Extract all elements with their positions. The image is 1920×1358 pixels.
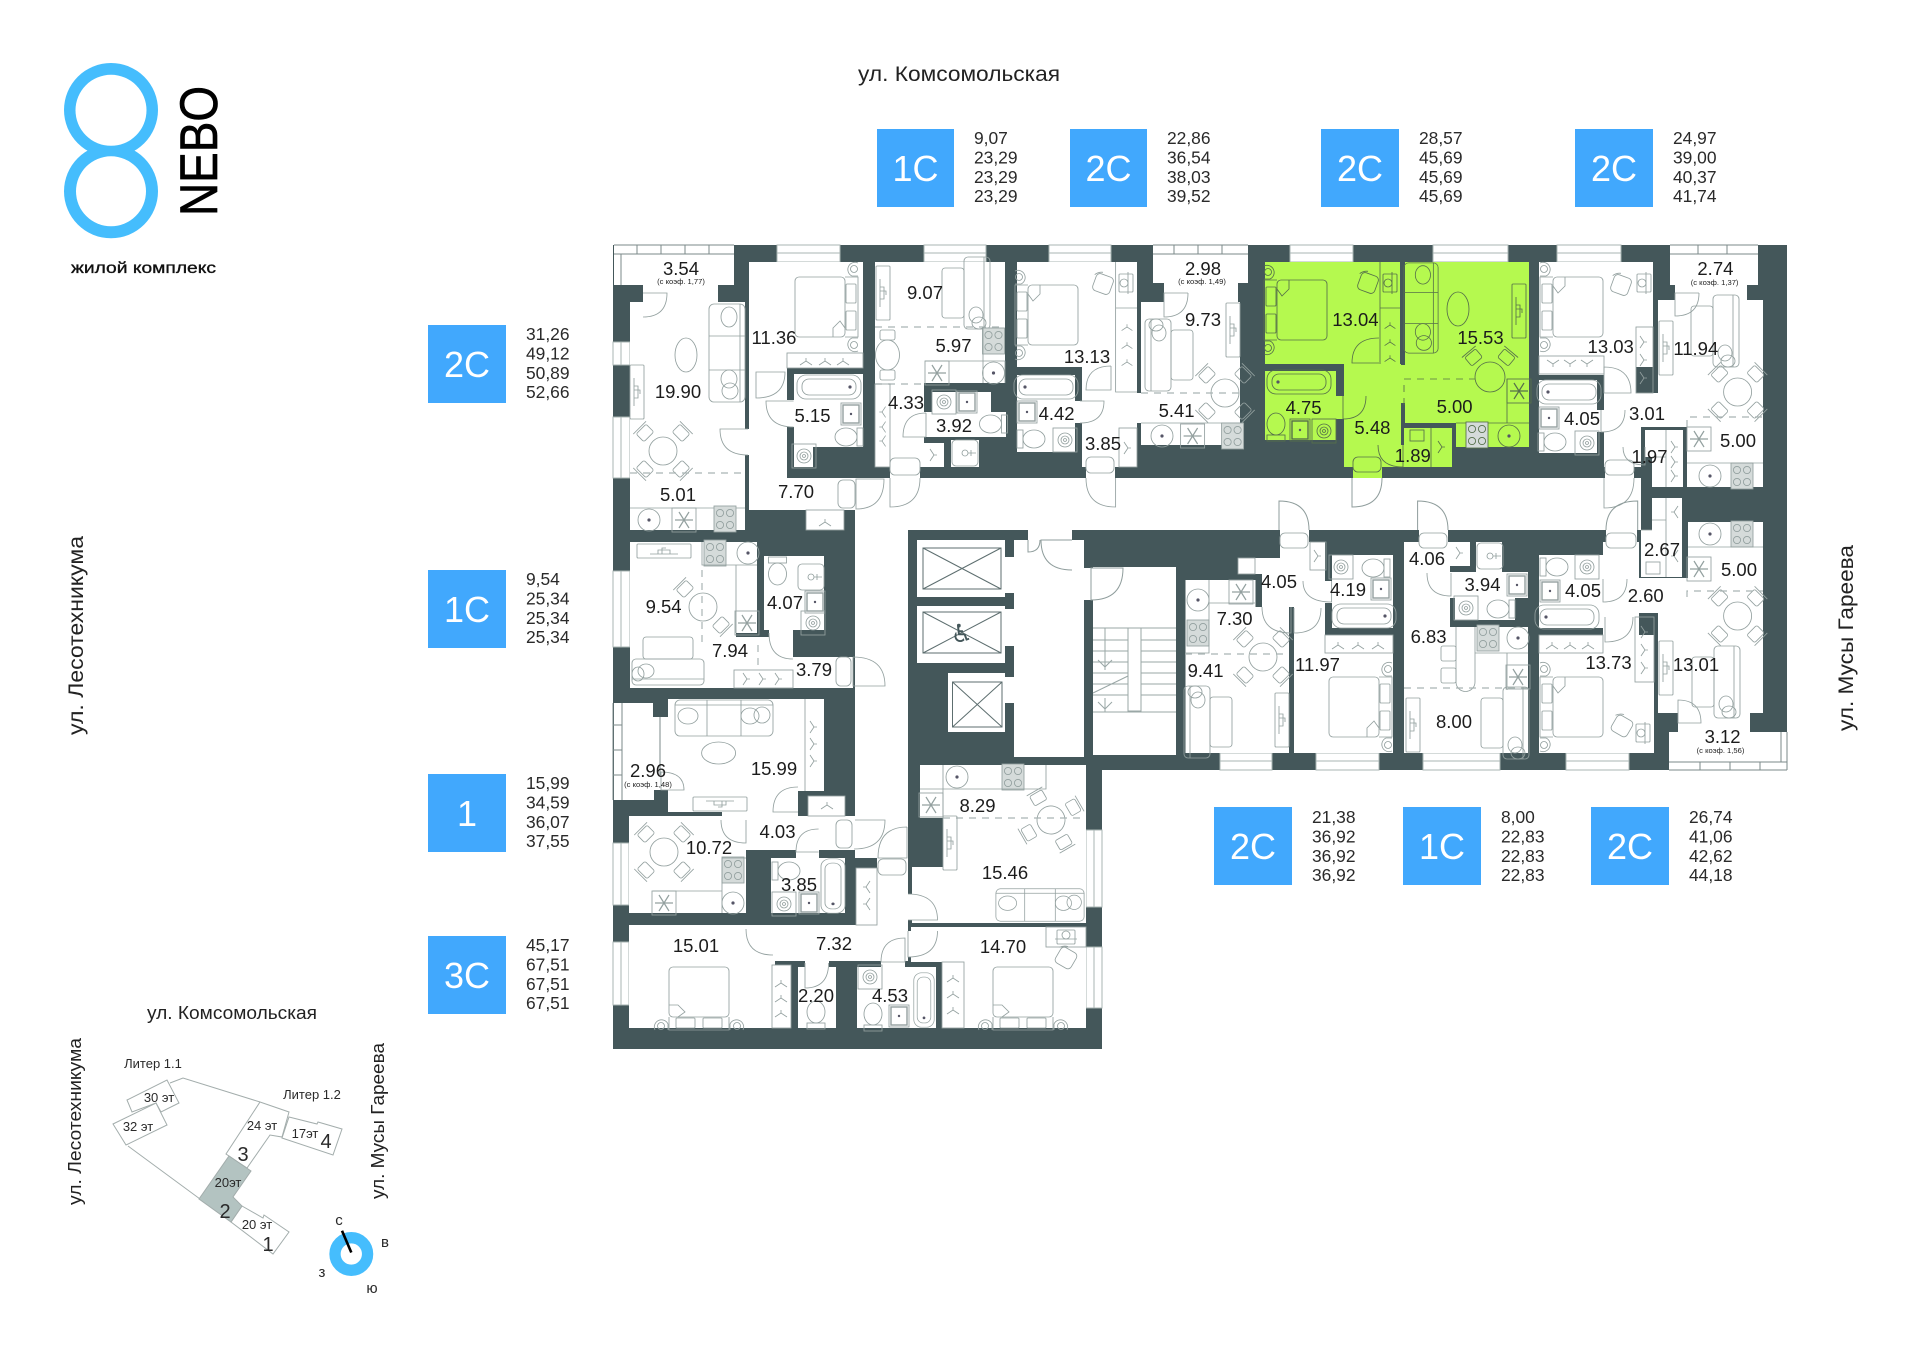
area labels: 1.97 — [1631, 446, 1668, 467]
entrance door — [1418, 501, 1448, 530]
badge 3С 45,17: 67,51 — [526, 954, 570, 974]
area labels: 2.60 — [1628, 585, 1664, 606]
badge 2С 28,57: 45,69 — [1419, 167, 1463, 187]
lobby doors — [1028, 540, 1123, 600]
badge 2С 31,26: 52,66 — [526, 382, 570, 402]
badge 1С 8,00: 8,00 — [1501, 807, 1535, 827]
area labels: 13.13 — [1064, 346, 1110, 367]
area labels — [1564, 258, 1756, 467]
area labels: 5.00 — [1720, 430, 1756, 451]
badge 2С 24,97 — [1575, 128, 1717, 207]
area labels: 4.33 — [888, 392, 924, 413]
area labels: 2.20 — [798, 985, 834, 1006]
badge 2С 31,26: 2С — [444, 344, 490, 385]
balcony rail — [1669, 732, 1787, 770]
badge 3С 45,17: 67,51 — [526, 974, 570, 994]
apartment 1 15,99 — [613, 699, 885, 916]
area labels: 3.92 — [936, 415, 972, 436]
lifts — [917, 540, 1014, 732]
area labels: 7.30 — [1217, 608, 1253, 629]
logo wordmark: NEBO — [170, 86, 229, 216]
badge 2С 28,57: 45,69 — [1419, 186, 1463, 206]
badge 2С 24,97: 2С — [1591, 148, 1637, 189]
badge 2С 24,97: 39,00 — [1673, 148, 1717, 168]
badge 1С 8,00: 22,83 — [1501, 826, 1545, 846]
street label: left: ул. Лесотехникума — [65, 536, 88, 735]
area labels: 13.73 — [1585, 652, 1632, 673]
key plan labels: Литер 1.2 — [283, 1087, 341, 1102]
rooms — [1265, 262, 1529, 478]
badge 2С 22,86: 2С — [1085, 148, 1132, 189]
furniture — [1404, 533, 1530, 759]
entrance door — [1279, 501, 1309, 530]
badge 1 15,99 — [428, 773, 570, 852]
area labels: 3.85 — [1085, 433, 1121, 454]
street label: right: ул. Мусы Гареева — [1835, 545, 1858, 731]
area labels: 5.41 — [1159, 400, 1195, 421]
area labels: (с коэф. 1,49) — [1178, 277, 1226, 286]
area labels: 15.01 — [673, 935, 719, 956]
badge 1С 9,54: 25,34 — [526, 627, 570, 647]
furniture — [1184, 533, 1396, 758]
key plan labels: 24 эт — [247, 1118, 277, 1133]
apartment 1С 9,07 — [875, 257, 1008, 507]
badge 1С 9,07 — [877, 128, 1018, 207]
apartment 2С 24,97 — [1537, 245, 1767, 508]
area labels: 5.97 — [935, 335, 972, 356]
rooms — [630, 542, 853, 688]
rooms — [1186, 530, 1393, 753]
area labels: 3.94 — [1464, 574, 1501, 595]
area labels — [1188, 571, 1366, 681]
key plan labels: 1 — [262, 1234, 274, 1256]
furniture — [1264, 262, 1531, 472]
badge 2С 21,38: 21,38 — [1312, 807, 1356, 827]
badge 2С 26,74 — [1591, 807, 1733, 885]
badge 1С 9,54: 25,34 — [526, 588, 570, 608]
badge 1С 8,00: 1С — [1419, 826, 1465, 867]
badge 2С 26,74: 44,18 — [1689, 865, 1733, 885]
lobby hall — [1014, 530, 1093, 757]
area labels: 4.06 — [1409, 548, 1445, 569]
area labels: (с коэф. 1,48) — [624, 780, 672, 789]
key plan labels: 3 — [237, 1144, 249, 1166]
area labels: 5.00 — [1437, 396, 1473, 417]
key plan street right: ул. Мусы Гареева — [368, 1042, 388, 1199]
area labels — [1409, 548, 1501, 732]
badge 3С 45,17 — [428, 935, 570, 1014]
compass — [319, 1212, 389, 1297]
area labels: 3.85 — [781, 874, 817, 895]
badge 1 15,99: 15,99 — [526, 773, 570, 793]
area labels: (с коэф. 1,37) — [1691, 278, 1739, 287]
apartment 1С 9,54 — [630, 540, 885, 688]
area labels: 7.70 — [778, 481, 814, 502]
icon: wheelchair: ♿ — [951, 619, 973, 648]
area labels: 11.36 — [752, 327, 796, 348]
area labels: 11.94 — [1673, 338, 1718, 359]
badge 2С 24,97: 40,37 — [1673, 167, 1717, 187]
badge 2С 31,26 — [428, 324, 570, 403]
key plan street left: ул. Лесотехникума — [65, 1037, 85, 1205]
corridor — [855, 478, 1641, 858]
area labels: 2.67 — [1644, 539, 1680, 560]
badge 2С 31,26: 49,12 — [526, 344, 570, 364]
badge 2С 22,86: 39,52 — [1167, 186, 1211, 206]
area labels: 6.83 — [1411, 626, 1447, 647]
balcony rail — [1153, 245, 1248, 254]
area labels: 4.05 — [1565, 580, 1601, 601]
badge 1С 8,00: 22,83 — [1501, 846, 1545, 866]
badge 1С 9,07: 9,07 — [974, 128, 1008, 148]
badge 2С 26,74: 42,62 — [1689, 846, 1733, 866]
badge 1С 9,07: 23,29 — [974, 186, 1018, 206]
area labels: 13.01 — [1673, 654, 1719, 675]
key plan labels: 4 — [320, 1131, 332, 1153]
badge 2С 26,74: 26,74 — [1689, 807, 1733, 827]
rooms — [614, 699, 855, 913]
key plan labels: Литер 1.1 — [124, 1056, 182, 1071]
area labels: 11.97 — [1295, 654, 1340, 675]
furniture — [634, 699, 885, 916]
apartment 2С 22,86 — [1014, 245, 1255, 507]
area labels — [646, 592, 832, 680]
area labels: (с коэф. 1,77) — [657, 277, 705, 286]
area labels — [624, 758, 817, 895]
window mullions — [621, 253, 1629, 1008]
logo figure eight — [64, 63, 158, 238]
area labels: 9.54 — [646, 596, 682, 617]
furniture — [1014, 262, 1255, 507]
area labels: 15.99 — [751, 758, 797, 779]
area labels: 10.72 — [686, 837, 732, 858]
rooms — [875, 262, 1006, 478]
badge 2С 21,38: 2С — [1230, 826, 1276, 867]
rooms — [1017, 245, 1248, 478]
rooms — [1539, 245, 1763, 487]
badge 2С 24,97: 24,97 — [1673, 128, 1717, 148]
area labels: 13.03 — [1588, 336, 1634, 357]
badge 2С 31,26: 31,26 — [526, 324, 570, 344]
balcony rail — [614, 245, 734, 285]
area labels: 4.05 — [1564, 408, 1600, 429]
badge 2С 21,38: 36,92 — [1312, 826, 1356, 846]
area labels — [673, 795, 1028, 1006]
rooms — [1404, 530, 1528, 753]
badge 2С 21,38 — [1214, 807, 1356, 885]
apartment 1С 8,00 — [1404, 501, 1530, 759]
badge 2С 28,57: 28,57 — [1419, 128, 1463, 148]
area labels: 3.01 — [1629, 403, 1665, 424]
building walls — [613, 245, 1787, 1049]
site key plan — [65, 1003, 389, 1297]
staircase — [1093, 567, 1176, 755]
area labels: 3.79 — [796, 659, 832, 680]
badge 1С 9,54: 9,54 — [526, 569, 560, 589]
badge 1С 9,54 — [428, 569, 570, 648]
compass: ю — [366, 1280, 378, 1297]
logo tagline: жилой комплекс — [71, 260, 216, 277]
area labels: 3.54 — [663, 258, 699, 279]
corridor and lobby — [855, 478, 1641, 858]
key plan street top: ул. Комсомольская — [147, 1003, 317, 1023]
entrance door — [1352, 478, 1382, 507]
area labels: 9.41 — [1188, 660, 1224, 681]
area labels — [888, 282, 972, 436]
badge 1 15,99: 36,07 — [526, 812, 570, 832]
area labels: 8.00 — [1436, 711, 1472, 732]
area labels: 4.03 — [759, 821, 796, 842]
area labels: 19.90 — [655, 381, 701, 402]
badge 2С 26,74: 2С — [1607, 826, 1653, 867]
badge 1 15,99: 37,55 — [526, 831, 570, 851]
apartment 2С 31,26 — [614, 245, 884, 532]
entrance door — [1606, 501, 1638, 530]
logo: 8 NEBO — [64, 63, 229, 277]
compass: з — [319, 1264, 326, 1281]
key plan current section — [199, 1156, 251, 1222]
area labels: (с коэф. 1,56) — [1697, 746, 1745, 755]
windows — [613, 245, 1629, 1008]
area labels: 5.15 — [794, 405, 831, 426]
area labels: 9.73 — [1185, 309, 1221, 330]
area labels: 15.53 — [1457, 327, 1504, 348]
apartment 2С 26,74 — [1535, 498, 1787, 770]
badge 2С 28,57 — [1321, 128, 1463, 207]
key plan building outlines — [113, 1078, 342, 1254]
area labels — [1565, 539, 1757, 755]
area labels: 7.32 — [816, 933, 852, 954]
balcony rail — [1670, 245, 1758, 254]
key plan labels: 30 эт — [144, 1090, 174, 1105]
badge 2С 21,38: 36,92 — [1312, 865, 1356, 885]
key plan labels: 2 — [219, 1201, 231, 1223]
apartment 2С 21,38 — [1184, 501, 1396, 758]
badge 1С 8,00 — [1403, 807, 1545, 885]
badge 1С 9,07: 23,29 — [974, 148, 1018, 168]
key plan labels: 32 эт — [123, 1119, 153, 1134]
area labels: 4.07 — [767, 592, 803, 613]
area labels — [1039, 258, 1226, 454]
area labels — [1286, 309, 1504, 466]
badge 1С 9,54: 1С — [444, 589, 490, 630]
badge 2С 21,38: 36,92 — [1312, 846, 1356, 866]
key plan labels: 20эт — [215, 1175, 241, 1190]
area labels: 1.89 — [1395, 445, 1431, 466]
balcony rail — [613, 703, 660, 800]
badge 2С 22,86: 22,86 — [1167, 128, 1211, 148]
badge 2С 22,86: 36,54 — [1167, 148, 1211, 168]
rooms — [614, 245, 863, 530]
area labels: 4.05 — [1261, 571, 1297, 592]
badge 2С 22,86 — [1070, 128, 1211, 207]
furniture — [1537, 262, 1767, 508]
street label: top: ул. Комсомольская — [858, 63, 1060, 86]
area labels: 7.94 — [712, 640, 748, 661]
badge 1С 9,54: 25,34 — [526, 608, 570, 628]
area labels: 3.12 — [1705, 726, 1741, 747]
area labels: 13.04 — [1332, 309, 1379, 330]
key plan labels: 17эт — [292, 1126, 318, 1141]
furniture — [1535, 498, 1767, 752]
badge 2С 28,57: 45,69 — [1419, 148, 1463, 168]
badge 1С 9,07: 23,29 — [974, 167, 1018, 187]
area labels: 14.70 — [980, 936, 1026, 957]
area labels: 2.74 — [1697, 258, 1733, 279]
badge 2С 22,86: 38,03 — [1167, 167, 1211, 187]
area labels: 15.46 — [982, 862, 1028, 883]
apartment 3С 45,17 — [629, 764, 1087, 1031]
key plan labels — [123, 1056, 341, 1256]
badge 1С 8,00: 22,83 — [1501, 865, 1545, 885]
badge 3С 45,17: 3С — [444, 955, 490, 996]
area labels: 2.96 — [630, 760, 666, 781]
badge 1С 9,07: 1С — [892, 148, 939, 189]
area labels: 4.19 — [1330, 579, 1366, 600]
area labels: 5.00 — [1721, 559, 1757, 580]
badge 3С 45,17: 45,17 — [526, 935, 570, 955]
compass: с — [335, 1212, 343, 1229]
furniture — [632, 540, 885, 688]
apartment 2С 28,57 highlighted — [1264, 262, 1531, 507]
compass: в — [381, 1234, 389, 1251]
area labels — [655, 258, 831, 505]
badge 2С 24,97: 41,74 — [1673, 186, 1717, 206]
floor plan — [613, 245, 1787, 1049]
badge 2С 31,26: 50,89 — [526, 363, 570, 383]
rooms — [1539, 498, 1787, 770]
area labels: 9.07 — [907, 282, 943, 303]
badge 1 15,99: 34,59 — [526, 792, 570, 812]
area labels: 4.53 — [872, 985, 908, 1006]
badge 2С 26,74: 41,06 — [1689, 826, 1733, 846]
badge 1 15,99: 1 — [457, 793, 477, 834]
furniture — [630, 262, 884, 532]
rooms — [629, 765, 1086, 1028]
area labels: 2.98 — [1185, 258, 1221, 279]
furniture — [875, 257, 1008, 507]
badge 2С 28,57: 2С — [1337, 148, 1383, 189]
area labels: 5.01 — [660, 484, 696, 505]
furniture — [654, 764, 1087, 1031]
area labels: 4.75 — [1286, 397, 1322, 418]
area labels: 5.48 — [1354, 417, 1390, 438]
badge 3С 45,17: 67,51 — [526, 993, 570, 1013]
key plan labels: 20 эт — [242, 1217, 272, 1232]
area labels: 8.29 — [959, 795, 996, 816]
area labels: 4.42 — [1039, 403, 1075, 424]
